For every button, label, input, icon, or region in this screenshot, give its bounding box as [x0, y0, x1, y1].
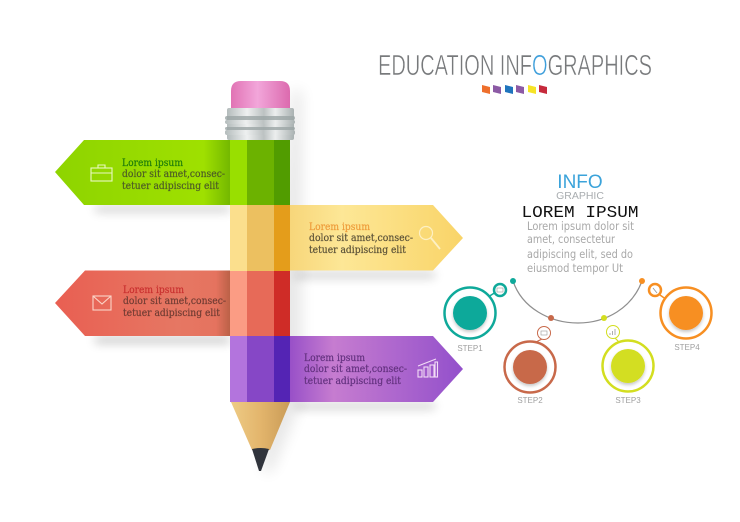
description: [527, 219, 634, 275]
description: Lorem ipsum dolor sit: [527, 219, 634, 233]
step 2: [504, 326, 556, 405]
text: green arrow: [122, 158, 225, 192]
band: purple: [230, 336, 290, 402]
text: yellow arrow: Lorem ipsum: [309, 222, 371, 233]
step 3: STEP3: [615, 396, 641, 405]
info heading: [556, 172, 604, 202]
icon: step 2 badge: [538, 326, 550, 340]
text: yellow arrow: dolor sit amet,consec-: [309, 233, 413, 244]
text: red arrow: dolor sit amet,consec-: [123, 296, 226, 307]
eraser: [231, 81, 290, 110]
text: green arrow: Lorem ipsum: [122, 158, 184, 169]
text: purple arrow: [304, 353, 407, 387]
graphite: [252, 448, 269, 471]
text: red arrow: [123, 285, 226, 319]
pencil shadow: [95, 90, 435, 472]
arrow: yellow: [290, 205, 463, 270]
icon: bar chart: [418, 359, 438, 377]
icon: step 3 badge: [606, 326, 620, 338]
icon: step 4 badge: [649, 284, 661, 296]
info heading: GRAPHIC: [556, 190, 604, 202]
text: yellow arrow: tetuer adipiscing elit: [309, 245, 406, 256]
text: purple arrow: Lorem ipsum: [304, 353, 366, 364]
description: amet, consectetur: [527, 232, 615, 246]
title colour swatches: [482, 85, 547, 94]
text: green arrow: tetuer adipiscing elit: [122, 181, 219, 192]
ferrule: [225, 108, 295, 140]
title: EDUCATION INFOGRAPHICS: [378, 50, 652, 82]
arrow: red: [55, 270, 230, 336]
step 1: [444, 284, 506, 353]
icon: briefcase: [91, 165, 112, 181]
subheading: LOREM IPSUM: [522, 203, 638, 222]
text: purple arrow: tetuer adipiscing elit: [304, 376, 401, 387]
arrow: purple: [290, 336, 463, 402]
description: adipiscing elit, sed do: [527, 247, 633, 261]
icon: step 1 badge: [494, 284, 506, 296]
step 4: STEP4: [674, 343, 700, 352]
description: eiusmod tempor Ut: [527, 261, 623, 275]
band: red: [230, 271, 290, 336]
band: green: [230, 140, 290, 205]
band: yellow: [230, 205, 290, 271]
step 4: [649, 284, 712, 352]
pencil: [225, 81, 295, 471]
text: green arrow: dolor sit amet,consec-: [122, 169, 225, 180]
arrow: green: [55, 140, 230, 205]
icon: envelope: [93, 296, 111, 310]
icon: magnifier: [420, 226, 440, 249]
text: red arrow: tetuer adipiscing elit: [123, 308, 220, 319]
text: yellow arrow: [309, 222, 413, 256]
step 2: STEP2: [517, 396, 543, 405]
info heading: INFO: [557, 172, 603, 193]
wooden tip: [231, 402, 290, 450]
text: purple arrow: dolor sit amet,consec-: [304, 364, 407, 375]
step 3: [602, 326, 654, 405]
text: red arrow: Lorem ipsum: [123, 285, 185, 296]
step 1: STEP1: [457, 344, 483, 353]
connecting arc: [510, 278, 645, 323]
